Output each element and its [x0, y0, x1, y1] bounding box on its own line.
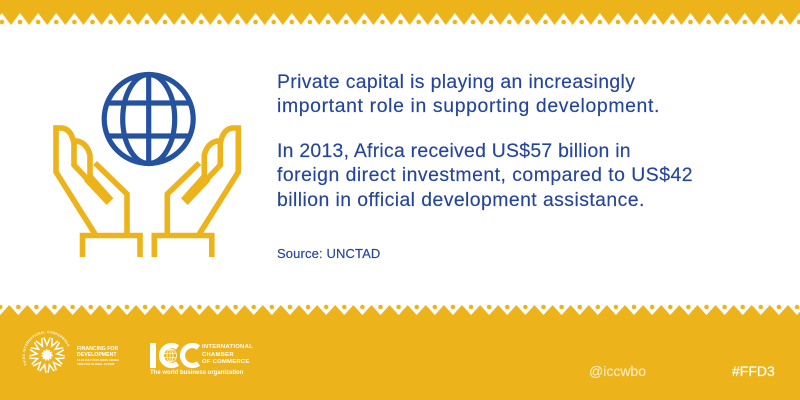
- logo text: international chamber of commerce: OF COMMERCE: [202, 359, 250, 365]
- logo tagline: The world business organization: [150, 370, 243, 376]
- hashtag: #FFD3: [732, 363, 775, 379]
- logo: FFD3 emblem: THIRD INTERNATIONAL CONFERENCE: [22, 330, 70, 366]
- bottom band: [0, 300, 800, 400]
- body text: [277, 140, 693, 211]
- body text: foreign direct investment, compared to US$42: [277, 164, 693, 186]
- logo text: international chamber of commerce: CHAMBER: [202, 352, 234, 358]
- heading text: Private capital is playing an increasingly: [277, 70, 635, 92]
- body text: billion in official development assistance.: [277, 189, 645, 211]
- logo text: financing for development: [77, 346, 119, 366]
- heading text: important role in supporting development.: [277, 95, 660, 117]
- logo text: financing for development: TIME FOR GLOBAL ACTION: [77, 362, 114, 366]
- logo text: international chamber of commerce: INTERNATIONAL: [202, 344, 253, 350]
- source: Source: UNCTAD: [277, 246, 380, 261]
- logo text: financing for development: 13-16 JULY 2015 ADDIS ABABA: [77, 358, 119, 362]
- icon: left hand: [56, 128, 140, 257]
- icon: globe: [104, 74, 193, 164]
- logo text: financing for development: FINANCING FOR: [77, 346, 118, 352]
- logo text: international chamber of commerce: [202, 344, 253, 365]
- logo: ICC mark: [150, 343, 198, 368]
- icon: right hand: [154, 128, 238, 257]
- heading text: [277, 70, 660, 117]
- body text: In 2013, Africa received US$57 billion in: [277, 140, 631, 162]
- handle: @iccwbo: [589, 363, 646, 379]
- logo text: financing for development: DEVELOPMENT: [77, 352, 116, 358]
- top zigzag band: [0, 0, 800, 30]
